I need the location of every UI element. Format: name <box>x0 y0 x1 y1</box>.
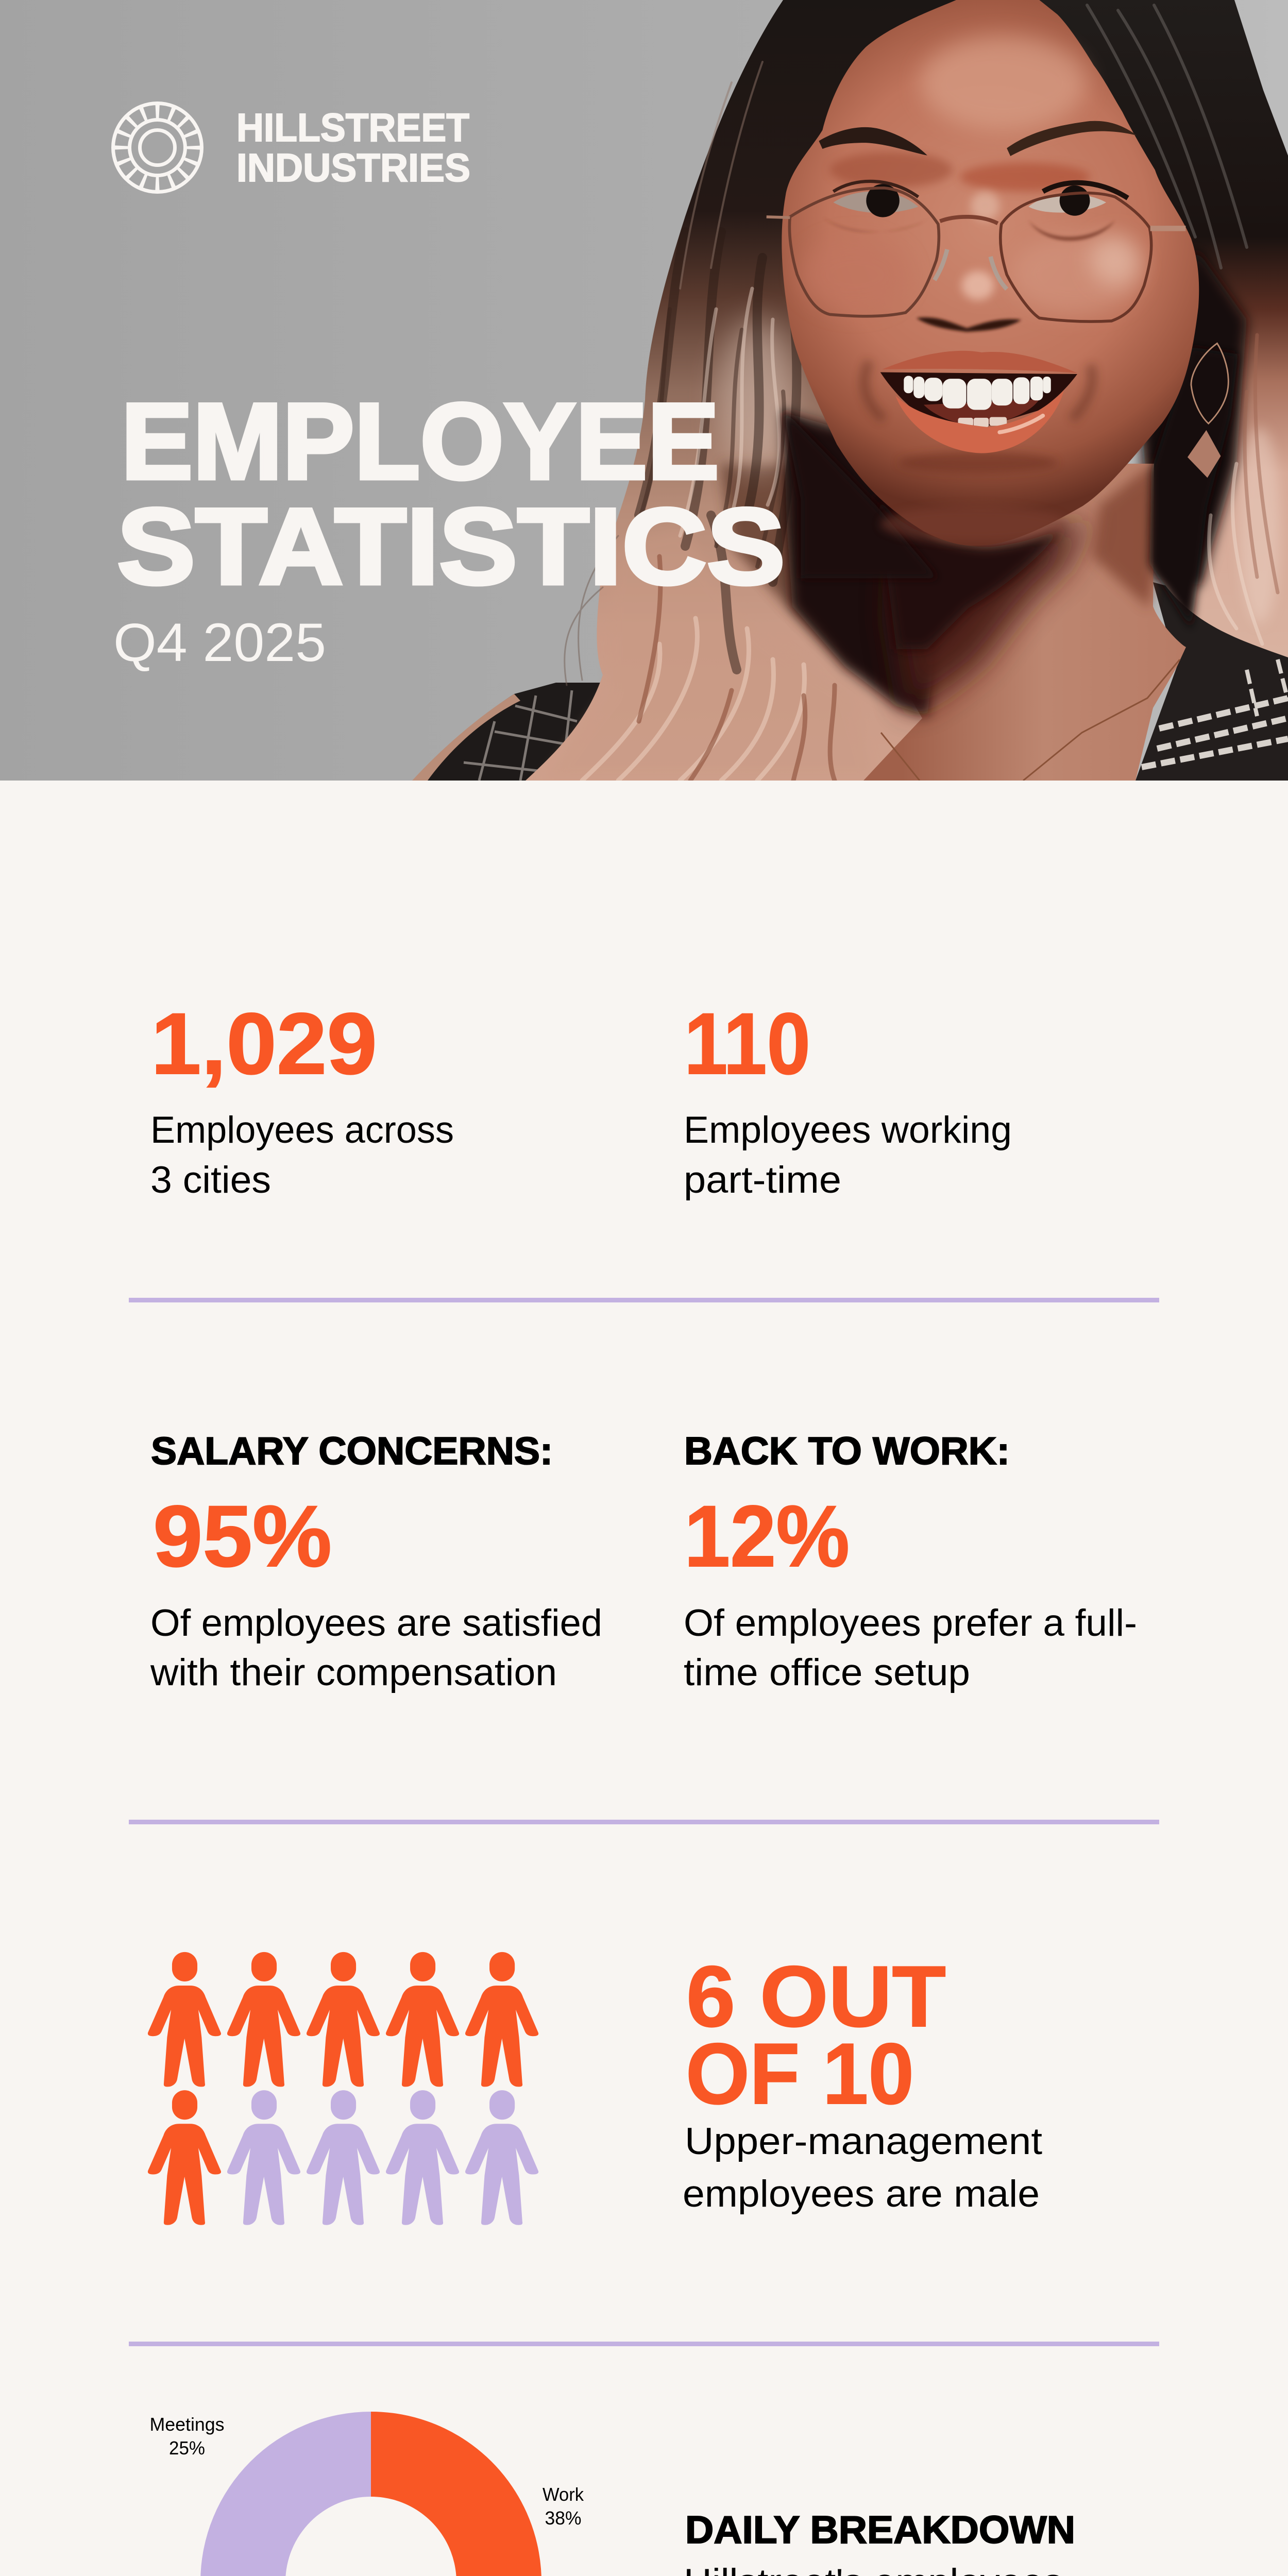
left hair black band over neck edge <box>783 412 933 716</box>
heading: salary concerns: SALARY CONCERNS: <box>151 1429 553 1472</box>
lower lip <box>895 391 1064 453</box>
photo: smiling woman with glasses <box>412 0 1288 781</box>
right hair inner dark strip <box>1139 247 1247 586</box>
right cheek highlight <box>1090 235 1141 285</box>
neck right shading <box>1092 464 1164 608</box>
caption: satisfied with compensation <box>150 1602 602 1693</box>
dark hair behind earring <box>1149 347 1238 629</box>
panel: part-time stat <box>684 995 1012 1201</box>
caption: prefer full-time office: time office setup <box>684 1652 970 1693</box>
upper lip <box>882 351 1077 373</box>
logo wordmark <box>236 106 470 190</box>
caption: prefer full-time office: Of employees prefer a full- <box>684 1602 1137 1644</box>
panel: back to work <box>684 1429 1137 1693</box>
smile shading <box>899 452 1057 473</box>
caption: employees working part-time <box>684 1109 1012 1201</box>
right eye <box>1028 183 1128 216</box>
necklace <box>881 659 1180 781</box>
pictogram: 6 of 10 people <box>148 1952 538 2225</box>
heading: back to work: BACK TO WORK: <box>684 1429 1010 1472</box>
brow-area warm tone <box>960 163 1090 192</box>
label: work: Work <box>543 2484 584 2505</box>
lower teeth <box>958 417 1007 427</box>
left hair mid-brown wedge <box>716 457 848 667</box>
under-eye shadows <box>822 217 1115 241</box>
title <box>117 381 785 607</box>
right hair pale highlight <box>1239 428 1280 623</box>
right hair <box>1039 0 1288 657</box>
neck shadow under jaw <box>876 489 1066 649</box>
label: work <box>543 2484 584 2529</box>
panel: daily breakdown text <box>683 2508 1110 2576</box>
nose <box>917 192 1021 332</box>
caption: satisfied with compensation: Of employees are satisfied <box>150 1602 602 1644</box>
caption: employees across cities: Employees across <box>150 1109 454 1151</box>
chin shading <box>880 506 1068 542</box>
neck <box>855 464 1186 781</box>
number: 12%: 12% <box>684 1487 850 1585</box>
caption: employees across cities: 3 cities <box>150 1159 271 1201</box>
caption: satisfied with compensation: with their compensation <box>150 1652 557 1693</box>
logo wordmark: INDUSTRIES <box>236 146 470 190</box>
earring <box>1188 343 1228 478</box>
right jacket with plaid <box>1136 582 1288 781</box>
upper teeth <box>904 376 1051 410</box>
left cheek tone <box>801 239 909 311</box>
left jacket <box>428 683 600 781</box>
right eyebrow <box>1007 121 1137 156</box>
caption: employees across cities <box>150 1109 454 1201</box>
left eye socket shade <box>829 152 953 188</box>
number: 1,029: 1,029 <box>151 995 377 1092</box>
caption: upper management male <box>683 2121 1042 2215</box>
label: meetings <box>149 2414 225 2459</box>
label: work: 38% <box>545 2507 581 2529</box>
caption: employees working part-time: Employees working <box>684 1109 1012 1151</box>
heading: daily breakdown: DAILY BREAKDOWN <box>685 2508 1075 2551</box>
panel: headcount stat <box>150 995 454 1201</box>
title: STATISTICS <box>117 486 785 607</box>
title: EMPLOYEE <box>121 381 719 502</box>
neck shadow soft <box>891 515 1092 711</box>
smile folds <box>865 362 1092 419</box>
caption: upper management male: employees are male <box>683 2173 1040 2215</box>
left hair <box>526 0 979 781</box>
number: 110: 110 <box>684 995 810 1092</box>
number: 95%: 95% <box>153 1487 332 1585</box>
panel: salary concerns <box>150 1429 602 1693</box>
dark hair under left jaw <box>783 409 938 578</box>
logo mark <box>113 103 202 192</box>
panel: 6 out of 10 text <box>683 1948 1042 2215</box>
headline: 6 out of 10 <box>686 1948 946 2122</box>
caption: prefer full-time office <box>684 1602 1137 1693</box>
mouth <box>880 351 1077 453</box>
donut chart: daily breakdown <box>147 2412 584 2576</box>
left hair streaks <box>565 62 835 781</box>
right cheek base <box>1010 235 1141 314</box>
header panel: photo banner <box>0 0 1288 781</box>
headline: 6 out of 10: OF 10 <box>686 2025 914 2122</box>
headline: 6 out of 10: 6 OUT <box>686 1948 946 2045</box>
left eyebrow <box>819 127 927 156</box>
caption: employees working part-time: part-time <box>684 1159 841 1201</box>
left eye <box>833 181 918 217</box>
glasses <box>767 188 1185 321</box>
logo wordmark: HILLSTREET <box>236 106 469 150</box>
right hair streaks <box>1087 5 1278 644</box>
subtitle: Q4 2025 <box>113 613 326 673</box>
lip highlight <box>999 416 1043 432</box>
caption: upper management male: Upper-management <box>685 2121 1042 2162</box>
label: meetings: 25% <box>169 2437 205 2459</box>
segment: meetings 25% <box>200 2412 371 2576</box>
forehead highlight <box>920 36 1087 130</box>
face group <box>767 0 1238 629</box>
left hair warm tone <box>560 710 586 747</box>
segment: work 38% <box>371 2412 541 2576</box>
face skin <box>782 0 1199 546</box>
label: meetings: Meetings <box>149 2414 225 2435</box>
left hair highlights <box>721 319 793 474</box>
lower gum <box>924 399 1039 426</box>
